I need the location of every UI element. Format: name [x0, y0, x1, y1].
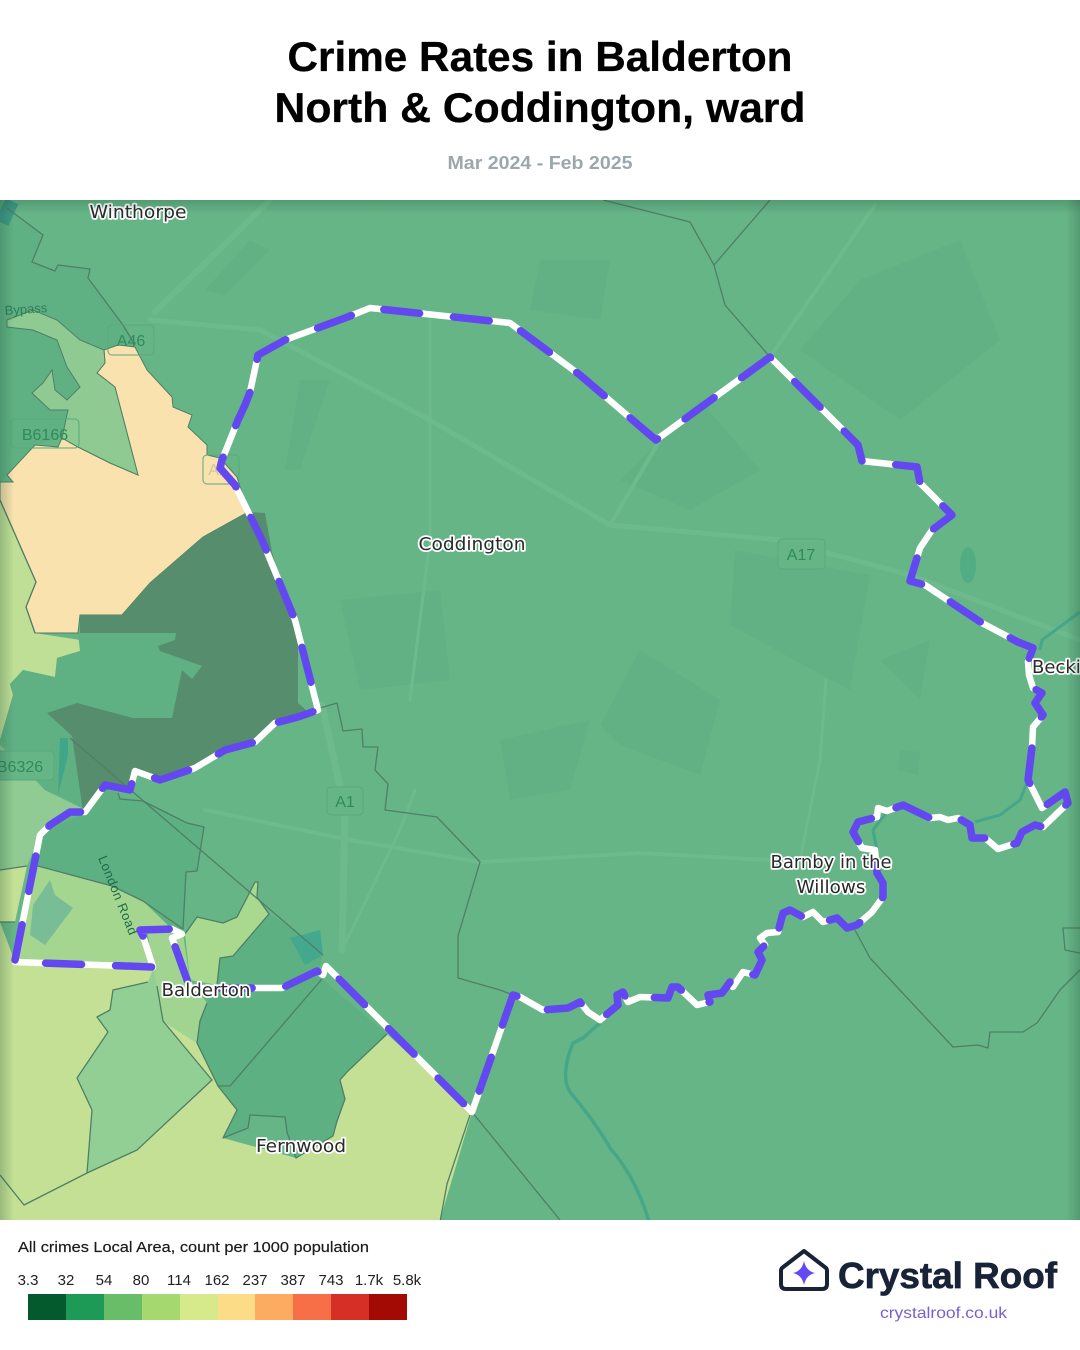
- legend tick labels: 32: [58, 1272, 74, 1289]
- map: field patches: [205, 240, 1000, 800]
- legend tick labels: 1.7k: [355, 1272, 384, 1289]
- map: pale region, Balderton north: [185, 882, 269, 985]
- road label: A46: A46: [117, 333, 145, 350]
- place label: Fernwood: Fernwood: [256, 1136, 346, 1157]
- map: green region north of Fernwood: [218, 979, 387, 1158]
- place label: Barnby in the Willows: Barnby in the: [770, 852, 892, 873]
- road label: B6166: B6166: [22, 427, 68, 444]
- map panel: [0, 198, 1080, 1225]
- title: Crime Rates in Balderton: [288, 33, 792, 80]
- title: [274, 33, 806, 131]
- road label: A17: A17: [787, 547, 815, 564]
- place label: Barnby in the Willows: [770, 852, 892, 898]
- road label: A46: [108, 325, 154, 355]
- road label: A1: A1: [335, 794, 355, 811]
- map: area boundary lines: [0, 200, 1080, 1222]
- map: green region south of Balderton line: [197, 975, 322, 1086]
- map: pale patch west: [0, 866, 27, 922]
- road label: London Road: London Road: [95, 854, 141, 937]
- road label: B6326: [0, 751, 54, 780]
- logo wordmark: Crystal Roof: [838, 1255, 1058, 1296]
- legend tick labels: [18, 1272, 422, 1289]
- legend tick labels: 3.3: [18, 1272, 38, 1289]
- road label: B6166: [11, 419, 79, 448]
- legend tick labels: 743: [318, 1272, 344, 1289]
- place label: Balderton: Balderton: [162, 980, 250, 1001]
- map: water features: [0, 198, 1080, 1225]
- map: cream high-crime region: [0, 345, 248, 633]
- road label: A1: [327, 787, 363, 815]
- ward boundary: white line with purple dashes: [15, 308, 1068, 1112]
- map: pale region inside boundary: [15, 866, 172, 967]
- map: light region lower-left: [0, 922, 472, 1220]
- icon: house with star: [781, 1251, 827, 1289]
- legend tick labels: 237: [242, 1272, 268, 1289]
- road label: A17: [778, 539, 825, 569]
- logo url: crystalroof.co.uk: [880, 1305, 1008, 1322]
- legend tick labels: 114: [167, 1272, 191, 1289]
- legend tick labels: 162: [204, 1272, 230, 1289]
- title: North & Coddington, ward: [274, 84, 806, 131]
- legend tick labels: 80: [133, 1272, 149, 1289]
- place label: Winthorpe: Winthorpe: [90, 202, 186, 223]
- map: roads: [410, 440, 662, 684]
- legend tick labels: 5.8k: [393, 1272, 422, 1289]
- map: mid-green west strip: [0, 745, 82, 870]
- place label: Becki: Becki: [1032, 657, 1080, 678]
- subtitle: date range: Mar 2024 - Feb 2025: [448, 153, 632, 173]
- map: green region, north of London Road: [38, 785, 204, 929]
- road label: A1 north: [203, 455, 239, 484]
- map: green region north of Balderton line: [217, 914, 323, 988]
- map: mid-green region, south-west: [77, 969, 212, 1173]
- map: region, Balderton centre: [148, 932, 207, 1042]
- logo: Crystal Roof: [781, 1251, 1058, 1322]
- legend tick labels: 387: [280, 1272, 306, 1289]
- map: mid-green region by bypass: [7, 310, 138, 475]
- place label: Coddington: Coddington: [418, 534, 526, 555]
- road label: A1 north: A1: [208, 462, 228, 479]
- road label: Bypass: Bypass: [4, 300, 48, 318]
- legend title: All crimes Local Area, count per 1000 population: [18, 1239, 369, 1256]
- legend colour scale: [28, 1294, 407, 1320]
- place label: Barnby in the Willows: Willows: [796, 877, 866, 898]
- map: dark low-crime region: [47, 512, 308, 812]
- legend: [18, 1239, 422, 1320]
- legend tick labels: 54: [96, 1272, 112, 1289]
- map edge vignette: [0, 200, 1080, 1220]
- map: green region west: [0, 640, 82, 808]
- map: darker region north-west: [0, 200, 135, 482]
- map: light region west: [0, 500, 80, 740]
